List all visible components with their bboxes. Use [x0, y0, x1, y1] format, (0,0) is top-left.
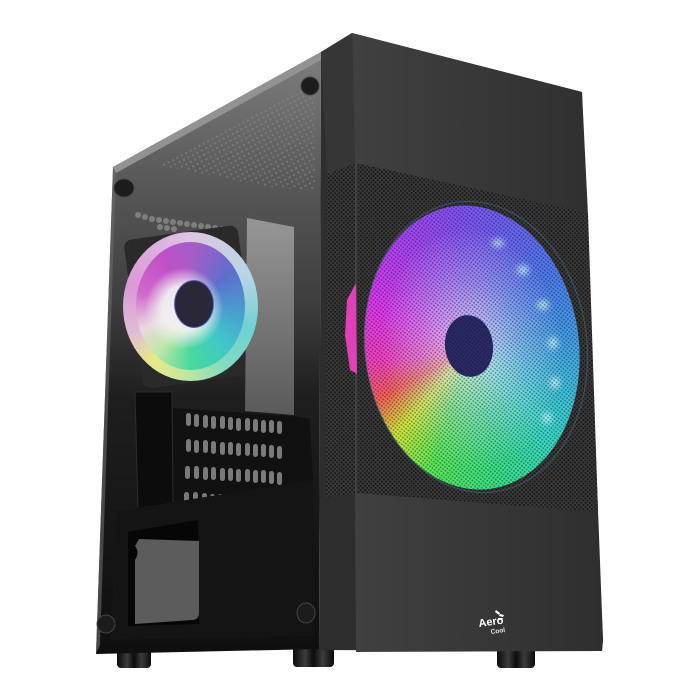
- big fan hub: [441, 312, 497, 380]
- mesh over fan: [348, 192, 596, 502]
- thumbscrews: [97, 77, 319, 633]
- feet: [117, 645, 535, 668]
- psu window: [128, 520, 199, 626]
- big rgb fan: [348, 193, 596, 502]
- small fan hub: [175, 281, 213, 327]
- gpu slot light panel: [245, 218, 294, 415]
- drive bay bracket: [135, 392, 173, 510]
- mesh fold line: [355, 163, 357, 493]
- side glass panel: [96, 52, 321, 654]
- motherboard tray: [173, 408, 313, 506]
- logo mark: [478, 610, 506, 636]
- front mesh: [326, 163, 598, 512]
- logo mark: Cool: [490, 627, 506, 636]
- front panel side bevel: [321, 33, 355, 175]
- top ceiling mesh: [158, 83, 315, 190]
- tray vent holes: [184, 413, 282, 502]
- upper vent holes: [135, 212, 231, 239]
- fan frame behind small fan: [123, 225, 258, 389]
- small fan inner blades: [136, 242, 245, 370]
- front panel bottom: [355, 491, 603, 652]
- big fan outer ring: [348, 189, 604, 505]
- small rgb fan: [123, 232, 258, 381]
- fan leds: [492, 239, 560, 424]
- front panel top: [352, 33, 588, 215]
- logo mark: Aero: [478, 615, 505, 630]
- psu shroud: [110, 480, 314, 640]
- front panel backing: [319, 33, 603, 651]
- psu window light: [135, 539, 199, 624]
- fan sliver on bevel: [345, 283, 357, 374]
